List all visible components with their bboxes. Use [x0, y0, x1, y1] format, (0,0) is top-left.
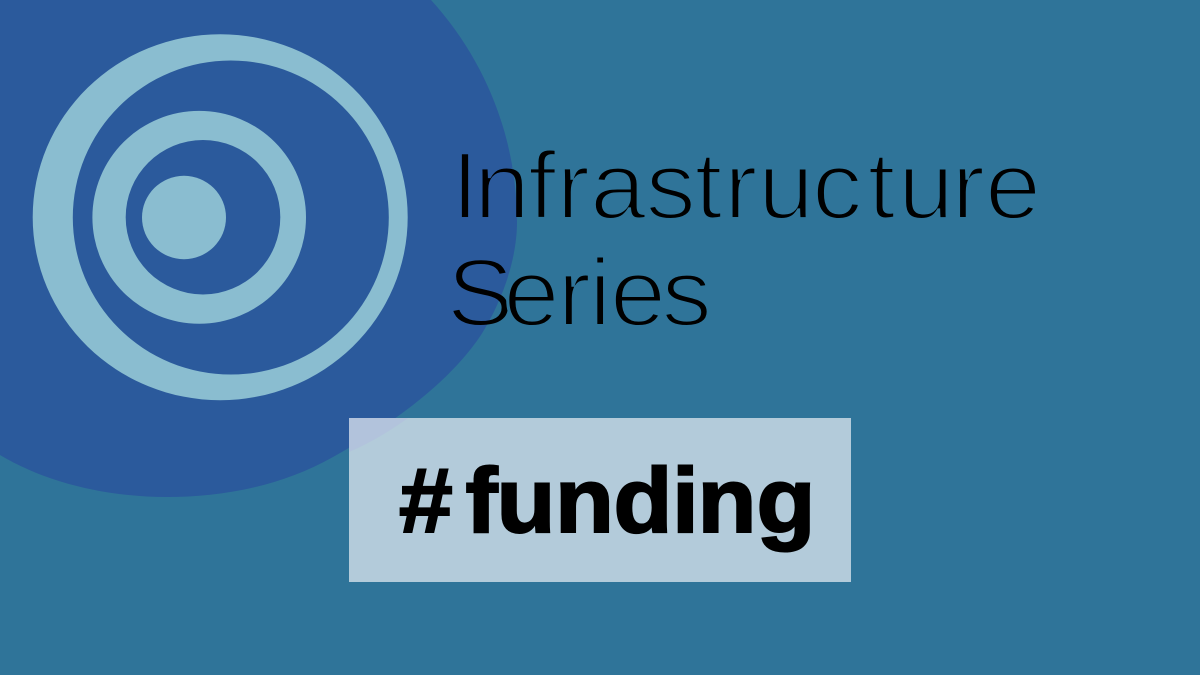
centre dot: [142, 176, 226, 259]
title line 1: Infrastructure: [451, 132, 1041, 239]
middle ring: [92, 111, 306, 324]
label box: [349, 418, 851, 582]
outer ring: [33, 34, 408, 400]
icon: concentric rings: [33, 34, 408, 400]
large dark blue blob: [0, 0, 517, 497]
title line 2: Series: [447, 239, 712, 346]
title: [447, 132, 1041, 346]
hashtag text: #funding: [399, 449, 816, 552]
box overlap with blob: [349, 418, 408, 452]
hashtag label: [349, 418, 851, 582]
